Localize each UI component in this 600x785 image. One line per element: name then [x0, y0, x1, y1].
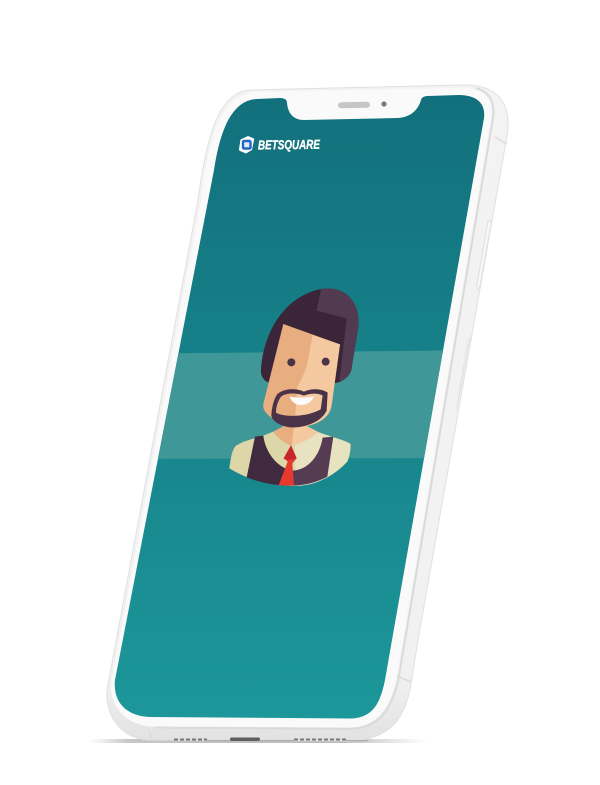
screen	[100, 90, 500, 730]
volume button	[477, 220, 491, 289]
power button	[456, 338, 470, 409]
vest	[247, 436, 292, 486]
camera	[381, 101, 387, 107]
white bezel highlight	[111, 88, 491, 728]
drop shadow under phone	[88, 739, 428, 743]
screen background	[100, 90, 500, 730]
speaker grille	[338, 102, 370, 108]
shoulders and shirt	[229, 432, 295, 486]
face	[263, 324, 340, 426]
mouth	[290, 396, 314, 405]
phone	[107, 85, 508, 741]
neck	[273, 426, 318, 446]
antenna lines	[148, 137, 507, 740]
translucent band	[158, 350, 443, 459]
logo icon	[239, 136, 254, 154]
tie	[279, 445, 297, 485]
eyes	[287, 358, 330, 366]
bottom ports	[174, 738, 368, 741]
logo wordmark: BETSQUARE	[258, 137, 320, 152]
beard	[271, 389, 328, 427]
avatar	[229, 288, 359, 486]
hair	[261, 288, 359, 385]
side band right	[155, 88, 493, 729]
phone body	[107, 85, 508, 741]
